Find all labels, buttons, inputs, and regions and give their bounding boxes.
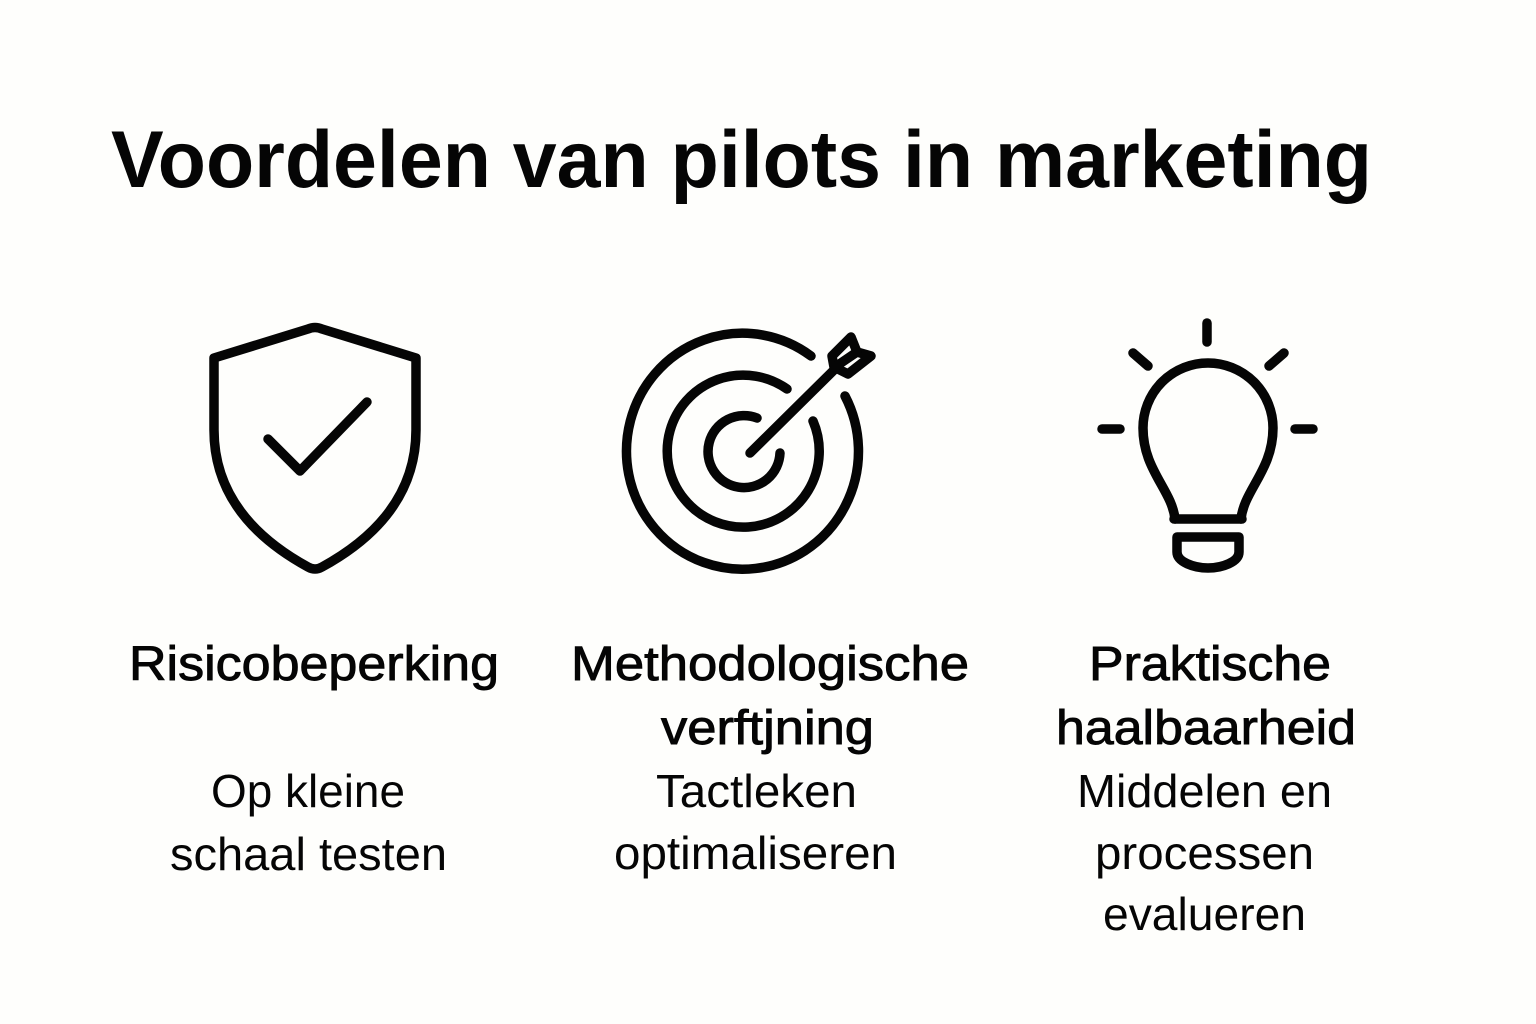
heading: methodologische verftjning: Methodologische: [571, 638, 969, 691]
icon: light bulb: [1102, 323, 1313, 568]
panel: methodologische verfijning: [571, 333, 969, 879]
description: middelen en processen evalueren: [1077, 765, 1332, 940]
description: middelen en processen evalueren: Middelen en: [1077, 765, 1332, 817]
panel: praktische haalbaarheid: [1056, 323, 1356, 940]
icon: target with arrow: [626, 333, 871, 569]
description: middelen en processen evalueren: evalueren: [1103, 888, 1306, 940]
heading: risicobeperking: Risicobeperking: [129, 638, 499, 691]
description: op kleine schaal testen: schaal testen: [170, 828, 447, 880]
heading: methodologische verftjning: verftjning: [661, 702, 874, 755]
description: tactleken optimaliseren: [614, 765, 897, 879]
description: tactleken optimaliseren: Tactleken: [656, 765, 857, 817]
description: op kleine schaal testen: Op kleine: [211, 765, 405, 817]
title: Voordelen van pilots in marketing: [111, 115, 1372, 205]
description: tactleken optimaliseren: optimaliseren: [614, 827, 897, 879]
heading: praktische haalbaarheid: Praktische: [1089, 638, 1331, 691]
description: middelen en processen evalueren: processen: [1095, 827, 1314, 879]
icon: shield with check: [214, 328, 416, 569]
heading: methodologische verftjning: [571, 638, 969, 755]
heading: praktische haalbaarheid: haalbaarheid: [1056, 702, 1356, 755]
heading: praktische haalbaarheid: [1056, 638, 1356, 755]
description: op kleine schaal testen: [170, 765, 447, 880]
panel: risicobeperking: [129, 328, 499, 880]
